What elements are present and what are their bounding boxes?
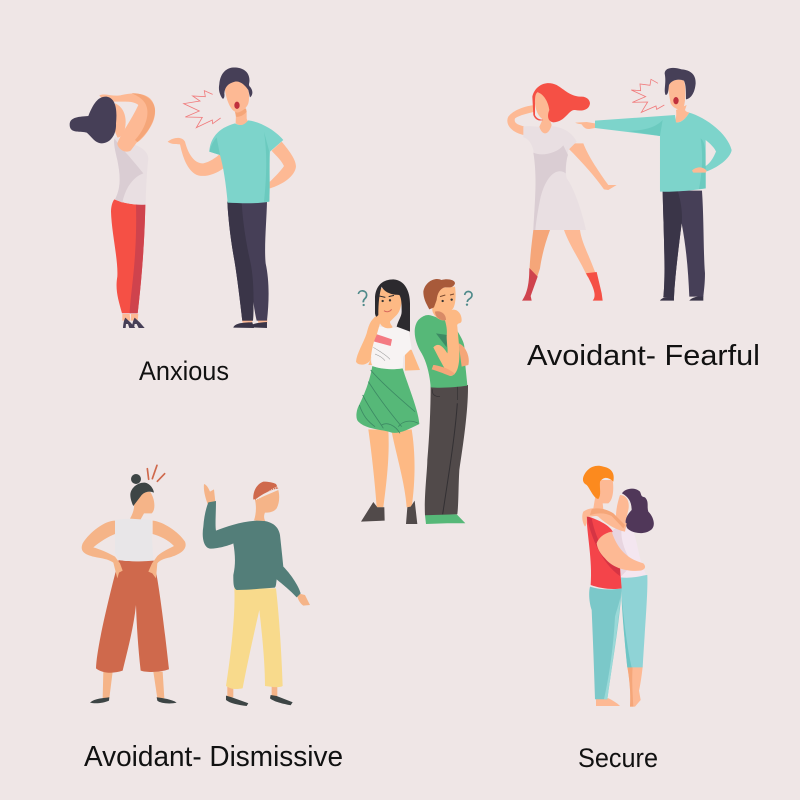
woman with white top and green skirt [356, 279, 420, 524]
woman facing the man [612, 489, 654, 707]
illustration: secure couple hugging [582, 466, 654, 707]
illustration: avoidant-fearful couple, man pointing at woman [507, 68, 732, 301]
woman holding her head, seen from behind [70, 93, 155, 328]
shouting burst [631, 79, 664, 112]
label: Avoidant- Fearful: Avoidant- Fearful [527, 340, 760, 372]
man shouting with outstretched hand [168, 67, 296, 328]
label: Secure: Secure [578, 743, 658, 773]
man waving with teal sweater and yellow trousers [203, 482, 310, 706]
woman with red hair walking away [507, 83, 617, 301]
shouting burst [184, 91, 221, 128]
man pointing [575, 68, 732, 301]
illustration: anxious couple arguing [70, 67, 296, 328]
woman with hands on hips and orange trousers [82, 465, 186, 703]
man with green shirt and dark trousers [415, 279, 472, 524]
label: Avoidant- Dismissive: Avoidant- Dismissive [84, 741, 343, 773]
label: Anxious: Anxious [139, 356, 229, 386]
man with orange hair and red shirt [582, 466, 645, 706]
illustration: avoidant-dismissive couple [82, 465, 310, 706]
illustration: thinking couple in the centre [356, 279, 472, 524]
